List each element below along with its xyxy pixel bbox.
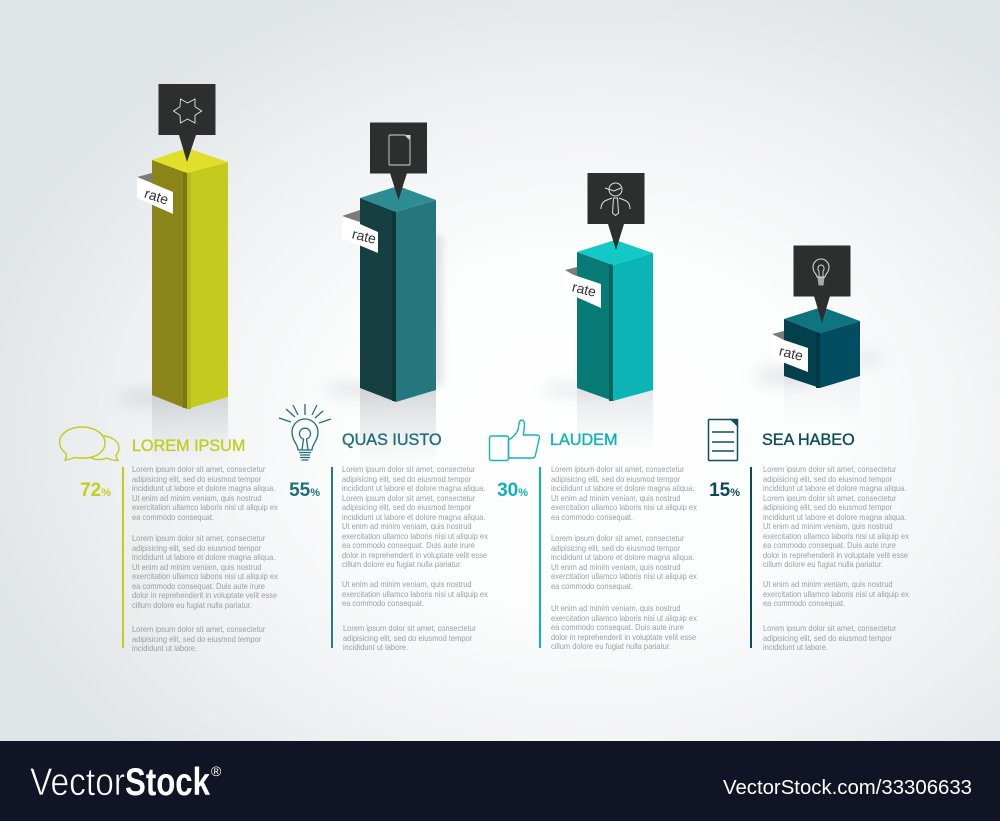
percentage: 30% [497,480,528,501]
rate label: rate [143,185,171,208]
callout: star icon [158,84,216,162]
bar 3: 30% [541,173,653,455]
text block: exercitation ullamco laboris nisi ut aliquip ex [342,530,488,540]
text block [763,579,909,608]
callout: document icon [370,122,427,200]
text block: Ut enim ad minim veniam, quis nostrud [763,521,893,531]
text block: Lorem ipsum dolor sit amet, consectetur [343,623,476,633]
footer logo: Stock [125,761,210,804]
text block: incididunt ut labore. [763,642,828,652]
percentage: 55% [289,480,320,501]
text block: incididunt ut labore. [343,642,408,652]
rate label: rate [571,278,598,300]
text block: exercitation ullamco laboris nisi ut aliquip ex [763,588,909,598]
heading: SEA HABEO [762,431,855,449]
divider [122,467,124,648]
rate label: rate [778,342,805,364]
rate label [565,267,601,308]
divider [539,467,541,648]
bar 4: 15% [755,246,884,425]
text block: Lorem ipsum dolor sit amet, consectetur [132,464,265,474]
divider [750,467,752,648]
text block: Ut enim ad minim veniam, quis nostrud [132,492,262,502]
footer logo [30,761,210,804]
text block: adipisicing elit, sed do eiusmod tempor [551,474,680,484]
text block: Lorem ipsum dolor sit amet, consectetur [132,533,265,543]
text block: adipisicing elit, sed do eiusmod tempor [763,474,892,484]
text block: incididunt ut labore et dolore magna aliqua. [132,483,275,493]
text block: ea commodo consequat. Duis aute irure [551,622,684,632]
text block: adipisicing elit, sed do eiusmod tempor [342,474,471,484]
heading: LOREM IPSUM [132,437,245,455]
text block: Ut enim ad minim veniam, quis nostrud [551,603,681,613]
text block: cillum dolore eu fugiat nulla pariatur. [342,559,462,569]
heading: LAUDEM [550,431,617,449]
text block: incididunt ut labore. [132,643,197,653]
icon: document [708,418,738,462]
text block: ea commodo consequat. Duis aute irure [763,540,896,550]
text block: Ut enim ad minim veniam, quis nostrud [551,492,681,502]
divider [331,467,333,648]
text block: adipisicing elit, sed do eiusmod tempor [763,632,892,642]
text block: incididunt ut labore et dolore magna aliqua. [551,552,694,562]
text block: ea commodo consequat. [342,598,424,608]
text block: dolor in reprehenderit in voluptate velit esse [342,550,487,560]
text block: adipisicing elit, sed do eiusmod tempor [551,542,680,552]
text block: adipisicing elit, sed do eiusmod tempor [343,632,472,642]
percentage: 15% [709,480,740,501]
text block: ea commodo consequat. Duis aute irure [342,540,475,550]
icon: thumbs up [488,419,540,462]
text block: incididunt ut labore et dolore magna aliqua. [763,483,906,493]
text block: ea commodo consequat. [132,512,214,522]
text block [132,624,266,653]
text block: dolor in reprehenderit in voluptate velit esse [132,590,277,600]
text block: exercitation ullamco laboris nisi ut aliquip ex [551,502,697,512]
rate label [137,173,173,214]
text block: adipisicing elit, sed do eiusmod tempor [132,542,261,552]
text block: Ut enim ad minim veniam, quis nostrud [551,562,681,572]
text block: exercitation ullamco laboris nisi ut aliquip ex [763,530,909,540]
callout: person icon [588,173,644,250]
panel: sea habeo [708,418,909,652]
text block: adipisicing elit, sed do eiusmod tempor [342,502,471,512]
text block: incididunt ut labore et dolore magna aliqua. [132,552,275,562]
text block: Lorem ipsum dolor sit amet, consectetur [342,492,475,502]
text block: exercitation ullamco laboris nisi ut aliquip ex [342,588,488,598]
text block: Lorem ipsum dolor sit amet, consectetur [551,464,684,474]
text block: Ut enim ad minim veniam, quis nostrud [342,521,472,531]
text block: adipisicing elit, sed do eiusmod tempor [132,474,261,484]
panel: laudem [488,419,697,651]
text block: exercitation ullamco laboris nisi ut aliquip ex [551,612,697,622]
text block: adipisicing elit, sed do eiusmod tempor [132,634,261,644]
rate label [772,331,808,372]
text block: dolor in reprehenderit in voluptate velit esse [763,550,908,560]
text block [551,464,697,522]
icon: light bulb [278,404,332,461]
text block: ea commodo consequat. [551,512,633,522]
text block: ea commodo consequat. [551,580,633,590]
text block: cillum dolore eu fugiat nulla pariatur. [763,559,883,569]
bar 1: 72% [116,84,228,465]
text block [551,533,697,590]
text block: exercitation ullamco laboris nisi ut aliquip ex [132,571,278,581]
text block: adipisicing elit, sed do eiusmod tempor [763,502,892,512]
text block: Lorem ipsum dolor sit amet, consectetur [763,623,896,633]
text block: incididunt ut labore et dolore magna aliqua. [342,512,485,522]
text block: incididunt ut labore et dolore magna aliqua. [342,483,485,493]
text block: exercitation ullamco laboris nisi ut aliquip ex [551,571,697,581]
text block [763,464,909,569]
text block [343,623,476,652]
text block: incididunt ut labore et dolore magna aliqua. [551,483,694,493]
text block [132,533,278,610]
text block [551,603,697,651]
footer logo: Vector [30,761,125,804]
text block: Ut enim ad minim veniam, quis nostrud [342,579,472,589]
panel: quas iusto [278,404,488,652]
text block [763,623,896,652]
rate label: rate [351,225,378,247]
text block: Lorem ipsum dolor sit amet, consectetur [763,492,896,502]
text block: Lorem ipsum dolor sit amet, consectetur [342,464,475,474]
text block: dolor in reprehenderit in voluptate velit esse [551,632,696,642]
icon: speech bubbles [58,426,120,462]
text block: Lorem ipsum dolor sit amet, consectetur [763,464,896,474]
percentage: 72% [80,480,111,501]
text block: incididunt ut labore et dolore magna aliqua. [763,512,906,522]
text block: Ut enim ad minim veniam, quis nostrud [763,579,893,589]
text block: ea commodo consequat. Duis aute irure [132,580,265,590]
text block: Lorem ipsum dolor sit amet, consectetur [551,533,684,543]
text block: Ut enim ad minim veniam, quis nostrud [132,562,262,572]
rate label [342,210,378,253]
text block [132,464,278,522]
text block [342,464,488,569]
text block: ea commodo consequat. [763,598,845,608]
footer url: VectorStock.com/33306633 [723,777,972,799]
callout: light bulb icon [794,246,850,323]
footer bar [0,741,1000,821]
bar 2: 55% [324,122,442,465]
text block: cillum dolore eu fugiat nulla pariatur. [132,600,252,610]
text block: exercitation ullamco laboris nisi ut aliquip ex [132,502,278,512]
panel: lorem ipsum [58,426,278,653]
heading: QUAS IUSTO [342,431,442,449]
text block: cillum dolore eu fugiat nulla pariatur. [551,641,671,651]
text block: Lorem ipsum dolor sit amet, consectetur [132,624,265,634]
text block [342,579,488,608]
registered mark: ® [211,763,222,779]
